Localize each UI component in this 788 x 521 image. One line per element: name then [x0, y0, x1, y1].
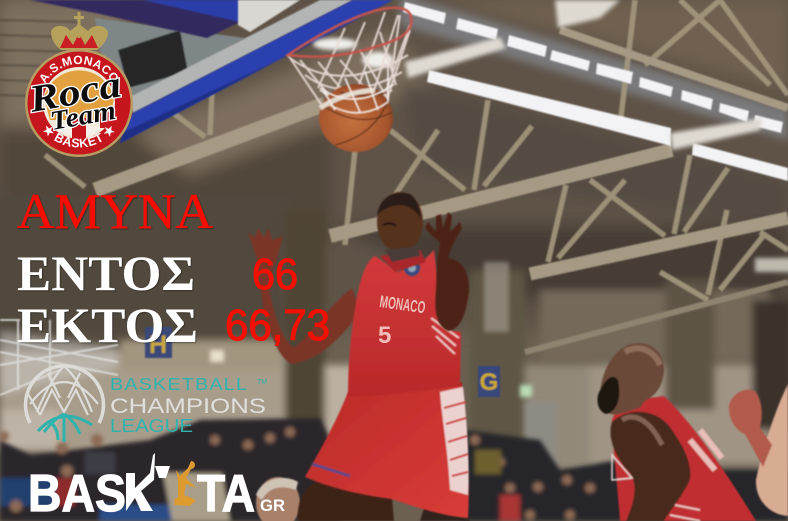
jersey number: 5: [378, 322, 391, 349]
wall light fixtures: [210, 258, 788, 397]
hoop mark: [155, 466, 170, 478]
backboard frame strip: [130, 0, 353, 113]
basketball: [319, 84, 393, 152]
domain suffix: GR: [260, 496, 285, 515]
Basketball Champions League logo: [26, 366, 267, 442]
script wordmark: [25, 64, 124, 136]
ceiling trusses: [45, 0, 788, 352]
raised fist and arm: [729, 390, 772, 467]
jersey: [612, 396, 756, 521]
second player: [597, 343, 788, 521]
hanging letter H sign: [145, 327, 172, 359]
hanging letter H sign: H: [149, 331, 167, 359]
heading: defense: ΑΜΥΝΑ: [17, 183, 213, 239]
arm: [611, 412, 690, 521]
label: inside: ΕΝΤΟΣ: [17, 245, 195, 301]
bright diagonal reflectors: [405, 0, 762, 150]
blue padding edge: [120, 0, 393, 143]
word: league: LEAGUE: [110, 416, 193, 436]
jersey: [348, 250, 461, 396]
script wordmark: Roca: [25, 64, 124, 121]
roof corrugation shading: [0, 20, 90, 96]
main beams: [95, 30, 788, 274]
value: outside: 66,73: [225, 301, 330, 350]
basketball quadrant: [44, 70, 114, 120]
walls: [0, 210, 788, 470]
ceiling lights: [403, 2, 788, 181]
hanging letter G sign: G: [480, 369, 498, 396]
crown: [51, 12, 108, 50]
crowd: [0, 418, 788, 521]
net back: [288, 12, 410, 115]
glow band behind lights: [400, 0, 788, 140]
hoop rim: [288, 8, 411, 57]
bright reflection behind net: [313, 38, 394, 68]
ceiling backdrop: [0, 0, 788, 345]
jersey wordmark: MONACO: [378, 292, 427, 317]
net front strands: [320, 62, 394, 113]
league patch: [404, 260, 420, 276]
backboard and basket: [30, 0, 411, 152]
right arm: [425, 212, 469, 331]
jersey stripes: [612, 455, 632, 480]
head: [377, 192, 426, 272]
left arm: [248, 228, 360, 364]
globe icon: [26, 366, 104, 423]
jersey side stripes: [431, 318, 459, 354]
backboard glass: [95, 18, 245, 110]
badge text bottom: ★ BASKET ★: [43, 126, 115, 148]
pale window grid left: [0, 320, 118, 395]
main player: [248, 192, 470, 521]
backboard padding: [30, 0, 240, 38]
trademark: TM: [257, 379, 267, 386]
word: basketball: BASKETBALL: [110, 374, 248, 394]
script wordmark: Team: [48, 95, 118, 136]
badge text top: A.S.MONACO: [40, 56, 118, 84]
word: champions: CHAMPIONS: [110, 395, 266, 418]
small face at bottom: [256, 477, 300, 521]
striped shield: [58, 126, 100, 137]
stylised K with hoop: [126, 453, 155, 511]
club logo: AS Monaco Roca Team: [25, 12, 133, 157]
legs: [298, 475, 470, 521]
orange jumping player figure: [174, 461, 196, 506]
value: inside: 66: [252, 250, 298, 299]
teal basketball icon: [38, 414, 92, 442]
far-right player's arm: [756, 384, 788, 516]
Basketa.gr logo: [28, 453, 285, 521]
shorts: [305, 384, 469, 518]
door: [526, 402, 556, 472]
label: outside: ΕΚΤΟΣ: [17, 297, 198, 353]
head: [599, 343, 664, 415]
badge circle: [25, 49, 133, 157]
